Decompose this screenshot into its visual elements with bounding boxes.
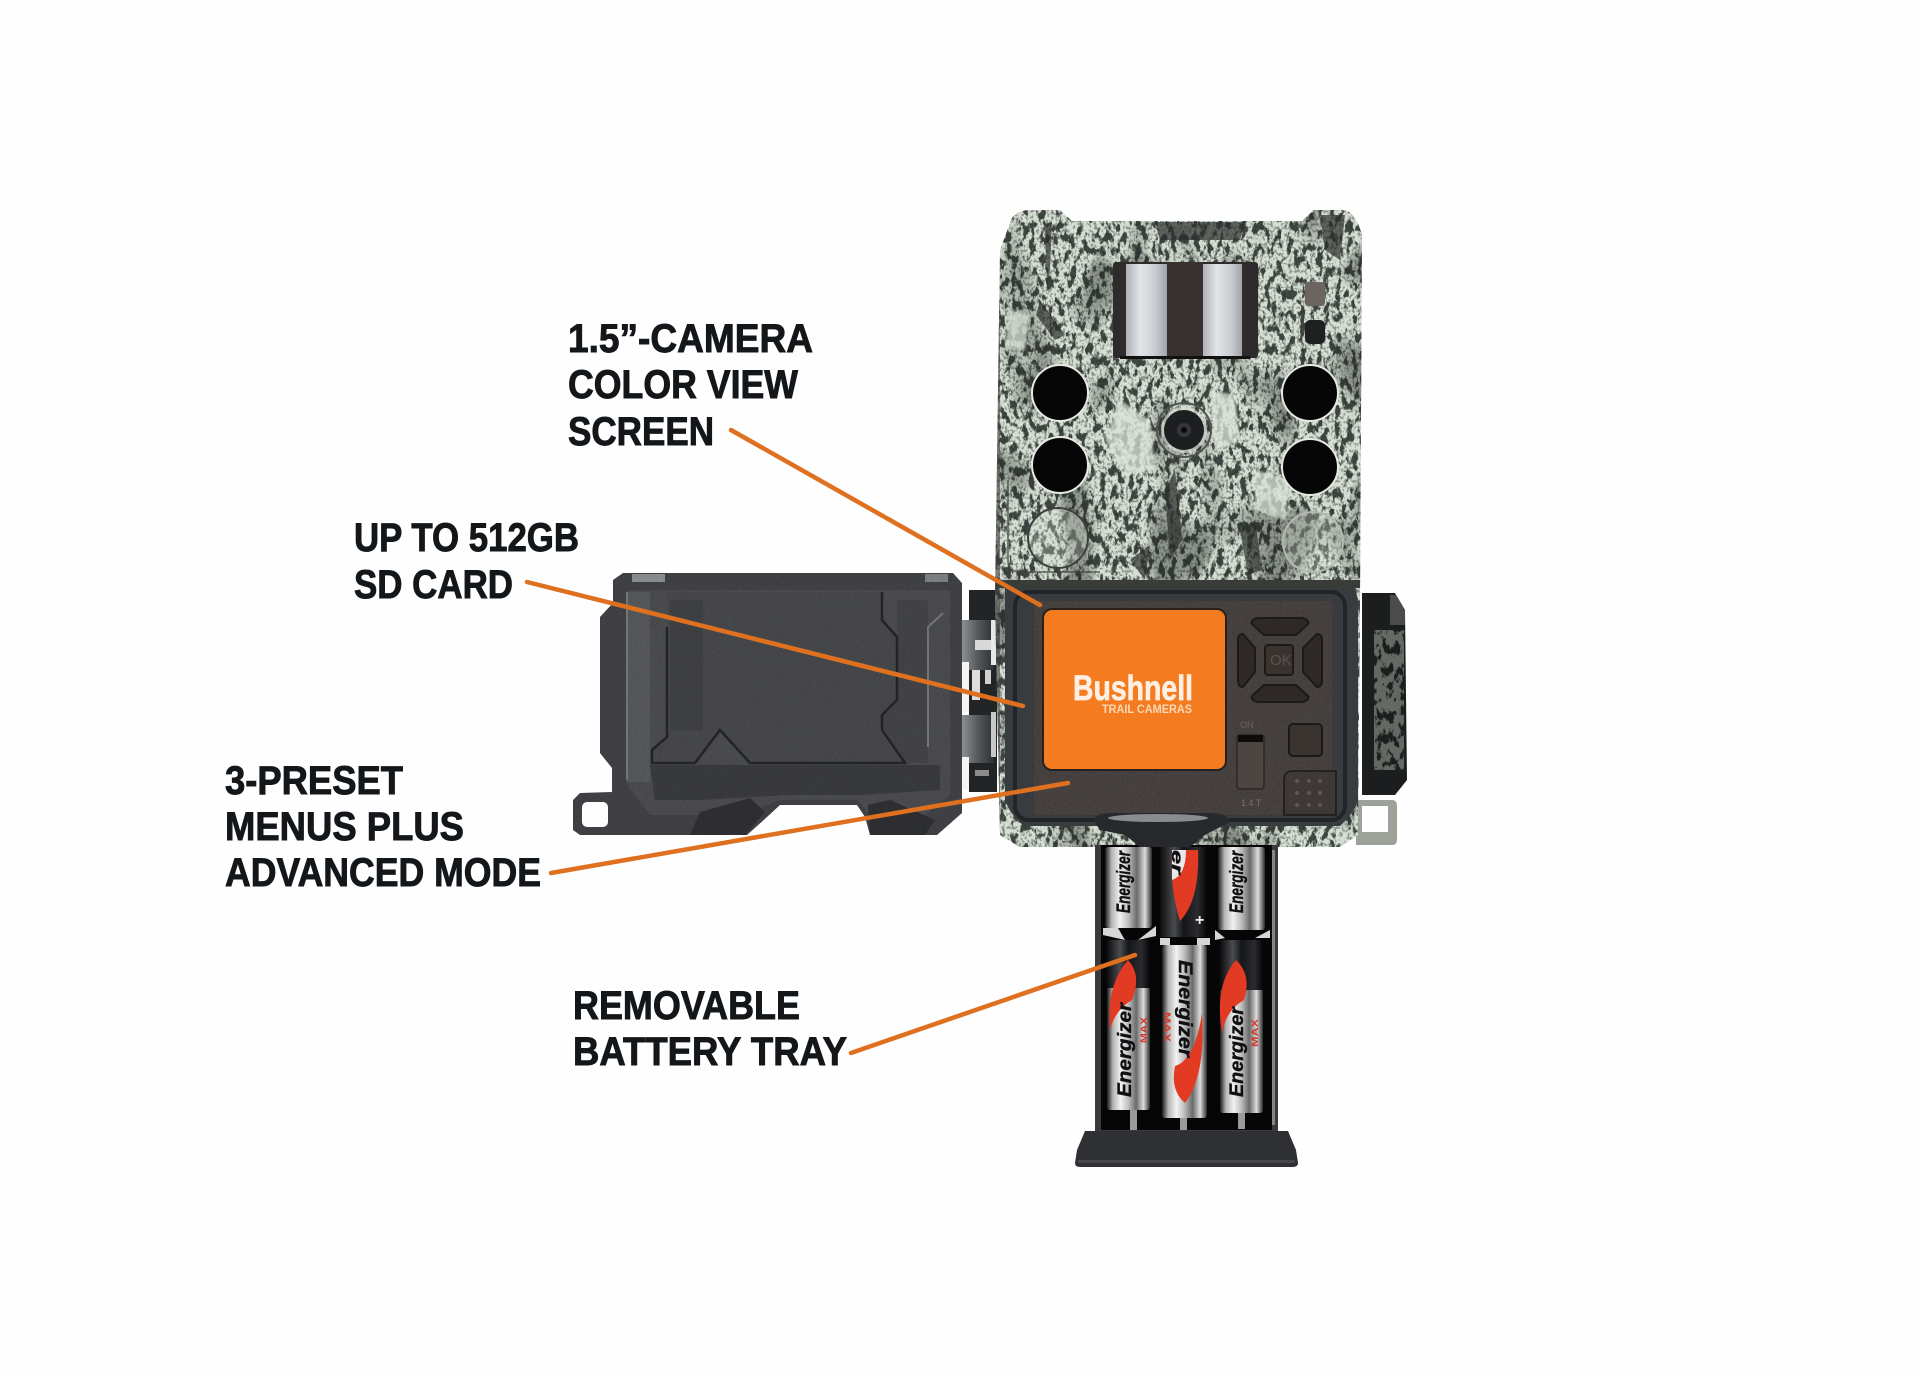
Bushnell logo: TRAIL CAMERAS xyxy=(1102,704,1192,716)
label: removable battery tray: REMOVABLE xyxy=(573,984,800,1028)
door tab hole xyxy=(582,802,608,827)
darker side band xyxy=(670,600,703,730)
lower sensor discs xyxy=(1028,508,1343,572)
motion sensor window xyxy=(1113,262,1258,359)
label: 1.5 inch camera color view screen: COLOR VIEW xyxy=(568,363,798,407)
battery tray xyxy=(1075,845,1298,1167)
bark streaks xyxy=(1036,215,1345,580)
control panel housing xyxy=(1005,587,1358,826)
tray base xyxy=(1075,1131,1298,1167)
battery compartment latch knob xyxy=(1093,813,1230,847)
battery: top middle xyxy=(1160,847,1207,937)
battery: top right xyxy=(1218,847,1265,930)
callout: camera screen xyxy=(568,317,1040,605)
leader line xyxy=(527,582,1023,706)
door right wall xyxy=(882,600,928,763)
menu button xyxy=(1289,724,1322,756)
battery: bottom middle: MAX xyxy=(1162,1012,1172,1042)
door hinge xyxy=(962,590,997,792)
infrared LEDs xyxy=(1032,365,1338,495)
battery: bottom middle: Energizer xyxy=(1174,960,1195,1059)
leader line xyxy=(551,783,1068,873)
battery: bottom right: MAX xyxy=(1250,1019,1260,1047)
callout: SD card xyxy=(354,516,1023,706)
battery: bottom left: Energizer xyxy=(1115,1001,1136,1097)
leader line xyxy=(851,955,1135,1053)
door lower wall xyxy=(650,765,940,800)
battery: bottom middle xyxy=(1162,945,1207,1130)
status indicators xyxy=(1305,282,1325,344)
left wall highlight xyxy=(626,592,650,782)
callout: preset menus xyxy=(225,759,1068,895)
camera door, opened to the left xyxy=(573,573,962,835)
label: up to 512GB SD card: UP TO 512GB xyxy=(354,516,579,560)
battery: bottom right xyxy=(1220,940,1263,1129)
OK label: OK xyxy=(1270,652,1292,669)
label: 1.5 inch camera color view screen: SCREEN xyxy=(568,410,714,454)
door rim highlights xyxy=(632,574,665,582)
door shell xyxy=(573,573,962,835)
door inner recess xyxy=(627,590,950,815)
panel face xyxy=(1034,601,1332,815)
callout: battery tray xyxy=(573,955,1135,1074)
label: up to 512GB SD card: SD CARD xyxy=(354,563,513,607)
orange display cover xyxy=(1043,609,1226,770)
battery: top middle: + xyxy=(1195,912,1204,929)
battery: top middle: er xyxy=(1168,850,1185,875)
Bushnell logo xyxy=(1073,669,1193,716)
battery: top left xyxy=(1105,847,1152,928)
mode slider switch xyxy=(1237,720,1264,808)
battery: top right: Energizer xyxy=(1227,850,1248,913)
label: 3-preset menus plus advanced mode: MENUS PLUS xyxy=(225,805,464,849)
lower right mounting tab xyxy=(1356,800,1397,845)
Bushnell logo: Bushnell xyxy=(1073,669,1193,708)
door bottom notch shading xyxy=(690,798,935,835)
mode slider switch: 1 4 T xyxy=(1241,798,1262,808)
label: 1.5 inch camera color view screen: 1.5”-CAMERA xyxy=(568,317,813,361)
door surface grain xyxy=(626,574,948,809)
label: 3-preset menus plus advanced mode: ADVANCED MODE xyxy=(225,851,541,895)
label: removable battery tray: BATTERY TRAY xyxy=(573,1030,847,1074)
housing bezel xyxy=(1005,587,1358,826)
leader line xyxy=(731,430,1040,605)
door moulding lines xyxy=(652,592,905,763)
right side latch xyxy=(1356,590,1410,845)
battery: bottom left xyxy=(1107,940,1150,1130)
camera lens xyxy=(1157,403,1211,457)
door floor panel xyxy=(652,592,905,763)
battery: bottom left: MAX xyxy=(1139,1017,1149,1043)
label: 1.5 inch camera color view screen xyxy=(568,317,813,454)
battery contact clips xyxy=(1103,926,1270,945)
label: up to 512GB SD card xyxy=(354,516,579,607)
battery: top left: Energizer xyxy=(1114,850,1135,913)
battery: bottom right: Energizer xyxy=(1227,1005,1248,1097)
mode slider switch: ON xyxy=(1240,720,1254,730)
camera body with camouflage xyxy=(990,205,1370,850)
label: removable battery tray xyxy=(573,984,847,1074)
speaker grille xyxy=(1284,771,1336,815)
label: 3-preset menus plus advanced mode xyxy=(225,759,541,895)
label: 3-preset menus plus advanced mode: 3-PRESET xyxy=(225,759,403,803)
tray frame xyxy=(1095,845,1278,1132)
navigation buttons xyxy=(1238,618,1322,702)
